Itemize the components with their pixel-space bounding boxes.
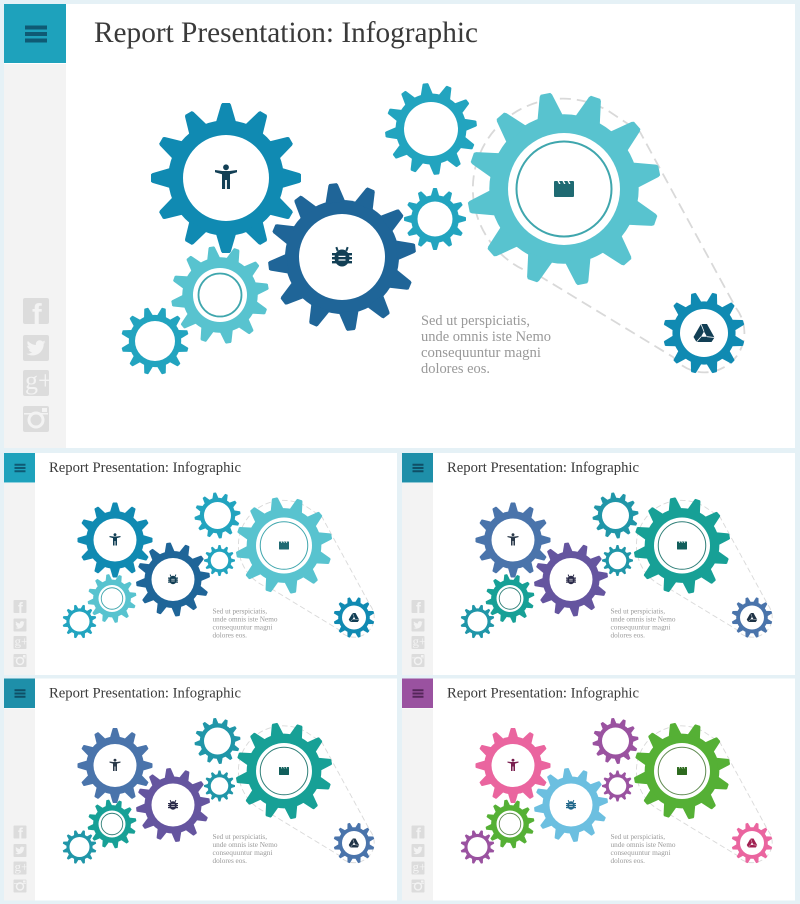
gear: large clapper <box>227 714 341 828</box>
panel: slide variant blue <box>4 453 397 675</box>
text block: Sed ut perspiciatis, <box>421 313 530 329</box>
gear: person <box>151 103 301 253</box>
social icons <box>412 600 426 667</box>
gear: top middle <box>192 490 243 541</box>
panel: slide variant pink and green <box>402 678 795 900</box>
text block: consequuntur magni <box>212 848 272 857</box>
text block: consequuntur magni <box>421 345 541 361</box>
gear: light ring <box>84 570 140 627</box>
text block: consequuntur magni <box>610 848 670 857</box>
gear: small left <box>457 601 498 642</box>
text block: Sed ut perspiciatis, <box>610 606 665 616</box>
text block: unde omnis iste Nemo <box>212 614 278 624</box>
social icons: f <box>416 826 421 842</box>
gear: person <box>78 502 152 578</box>
text block: unde omnis iste Nemo <box>610 614 676 624</box>
social icons: f <box>32 299 42 331</box>
social icons: g+ <box>25 366 53 395</box>
dashed belt outline <box>473 99 744 372</box>
social icons <box>14 600 28 667</box>
social icons: f <box>18 601 23 617</box>
text block: consequuntur magni <box>610 622 670 632</box>
gear: light ring <box>84 796 140 852</box>
title: Report Presentation: Infographic <box>49 686 241 702</box>
text block: dolores eos. <box>212 856 247 865</box>
gear: small left <box>59 601 100 642</box>
text block: dolores eos. <box>212 630 247 640</box>
gear: small middle <box>204 770 235 802</box>
text block: consequuntur magni <box>212 622 272 632</box>
text block: Sed ut perspiciatis, <box>212 832 267 841</box>
gear: bug <box>530 764 612 846</box>
header menu button <box>402 453 433 482</box>
header menu button <box>402 678 433 708</box>
gear: small middle <box>602 770 633 802</box>
text block: unde omnis iste Nemo <box>212 840 278 849</box>
text block: dolores eos. <box>610 630 645 640</box>
dashed belt outline <box>636 500 772 637</box>
social icons: f <box>416 601 421 617</box>
gear: light ring <box>482 570 538 627</box>
title: Report Presentation: Infographic <box>94 17 478 49</box>
gear: light ring <box>482 796 538 852</box>
gear: person <box>476 728 550 803</box>
gear: drive <box>727 818 777 868</box>
gear: drive <box>329 818 379 868</box>
social icons: g+ <box>412 859 426 874</box>
gear: small left <box>59 826 100 868</box>
text block: dolores eos. <box>610 856 645 865</box>
social icons <box>412 826 426 892</box>
gear: small middle <box>602 545 633 576</box>
social icons: f <box>18 826 23 842</box>
social icons: g+ <box>14 859 28 874</box>
title: Report Presentation: Infographic <box>447 460 639 476</box>
header menu button <box>4 678 35 708</box>
gear: small middle <box>204 545 235 576</box>
header menu button <box>4 453 35 482</box>
text block: Sed ut perspiciatis, <box>212 606 267 616</box>
title: Report Presentation: Infographic <box>49 460 241 476</box>
gear: bug <box>530 538 612 621</box>
gear: bug <box>132 764 214 846</box>
gear: top middle <box>590 490 641 541</box>
social icons <box>23 298 53 432</box>
gear: light ring <box>163 238 277 352</box>
title: Report Presentation: Infographic <box>447 686 639 702</box>
dashed belt outline <box>636 726 772 863</box>
gear: bug <box>132 538 214 621</box>
gear: small left <box>457 826 498 868</box>
text block: dolores eos. <box>421 361 490 377</box>
gear: small middle <box>404 188 466 250</box>
panel: slide variant indigo bottom <box>4 678 397 900</box>
dashed belt outline <box>238 726 374 863</box>
gear: person <box>476 502 550 578</box>
gear: top middle <box>380 78 482 180</box>
gear: bug <box>260 175 424 339</box>
gear: small left <box>113 299 197 383</box>
gear: large clapper <box>625 714 739 828</box>
text block: unde omnis iste Nemo <box>421 329 551 345</box>
gear: top middle <box>192 715 243 767</box>
gear: large clapper <box>450 75 678 303</box>
panel: main slide <box>4 4 795 448</box>
social icons: g+ <box>14 634 28 648</box>
text block: Sed ut perspiciatis, <box>610 832 665 841</box>
gear: person <box>78 728 152 803</box>
text block: unde omnis iste Nemo <box>610 840 676 849</box>
gear: drive <box>329 592 379 643</box>
social icons <box>14 826 28 892</box>
gear: top middle <box>590 715 641 767</box>
dashed belt outline <box>238 500 374 637</box>
gear: large clapper <box>227 489 341 602</box>
gear: drive <box>727 592 777 643</box>
social icons: g+ <box>412 634 426 648</box>
panel: slide variant indigo top <box>402 453 795 675</box>
gear: large clapper <box>625 489 739 602</box>
gear: drive <box>654 283 754 383</box>
header menu button <box>4 4 66 63</box>
